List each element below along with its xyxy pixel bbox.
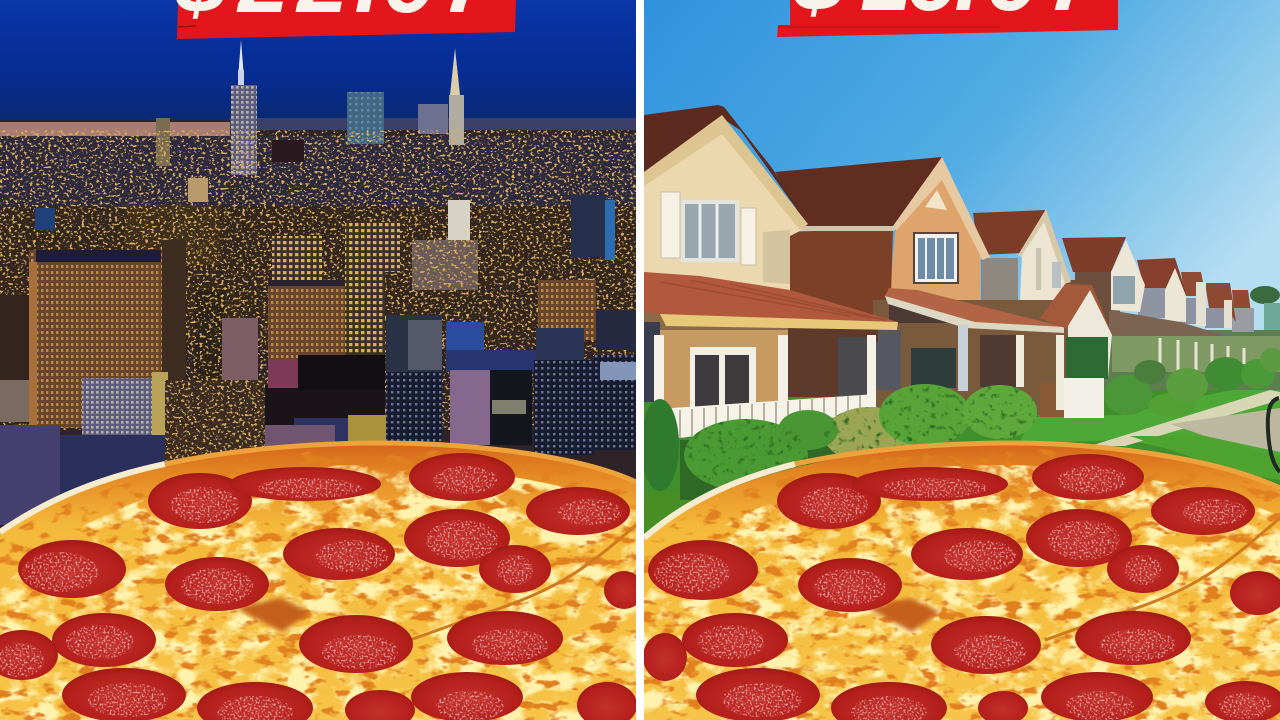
panel: New York City at night: [0, 0, 644, 720]
pepperoni highlights: [654, 466, 1271, 720]
porch: house 2: [873, 288, 1068, 417]
shutter and window: [661, 192, 680, 258]
porch: house 1: [644, 272, 898, 438]
hedges and shrubs: [641, 348, 1280, 500]
porch: house 3: [1040, 284, 1112, 418]
white railing: [672, 394, 876, 438]
day sky: [644, 0, 1280, 330]
lawn and footpath: [644, 390, 1280, 534]
night sky: [0, 0, 636, 125]
distant tree: [1250, 286, 1280, 304]
pepperoni highlights: [0, 466, 622, 720]
pizza: left: [0, 443, 644, 720]
dark lamp post at right edge: [1268, 398, 1280, 472]
house 2: [775, 157, 990, 330]
scattered city lights: [0, 130, 636, 430]
window: [914, 233, 958, 283]
house 3: [973, 209, 1071, 310]
pizza: right: [643, 443, 1280, 720]
pepperoni slices: [643, 454, 1280, 720]
front door: [690, 347, 756, 409]
house 1: [644, 105, 808, 290]
city skyline and buildings: [0, 40, 636, 540]
row of distant houses: [1060, 237, 1280, 390]
pepperoni slices: [0, 453, 644, 720]
panel: suburban street in daylight: [641, 0, 1280, 720]
